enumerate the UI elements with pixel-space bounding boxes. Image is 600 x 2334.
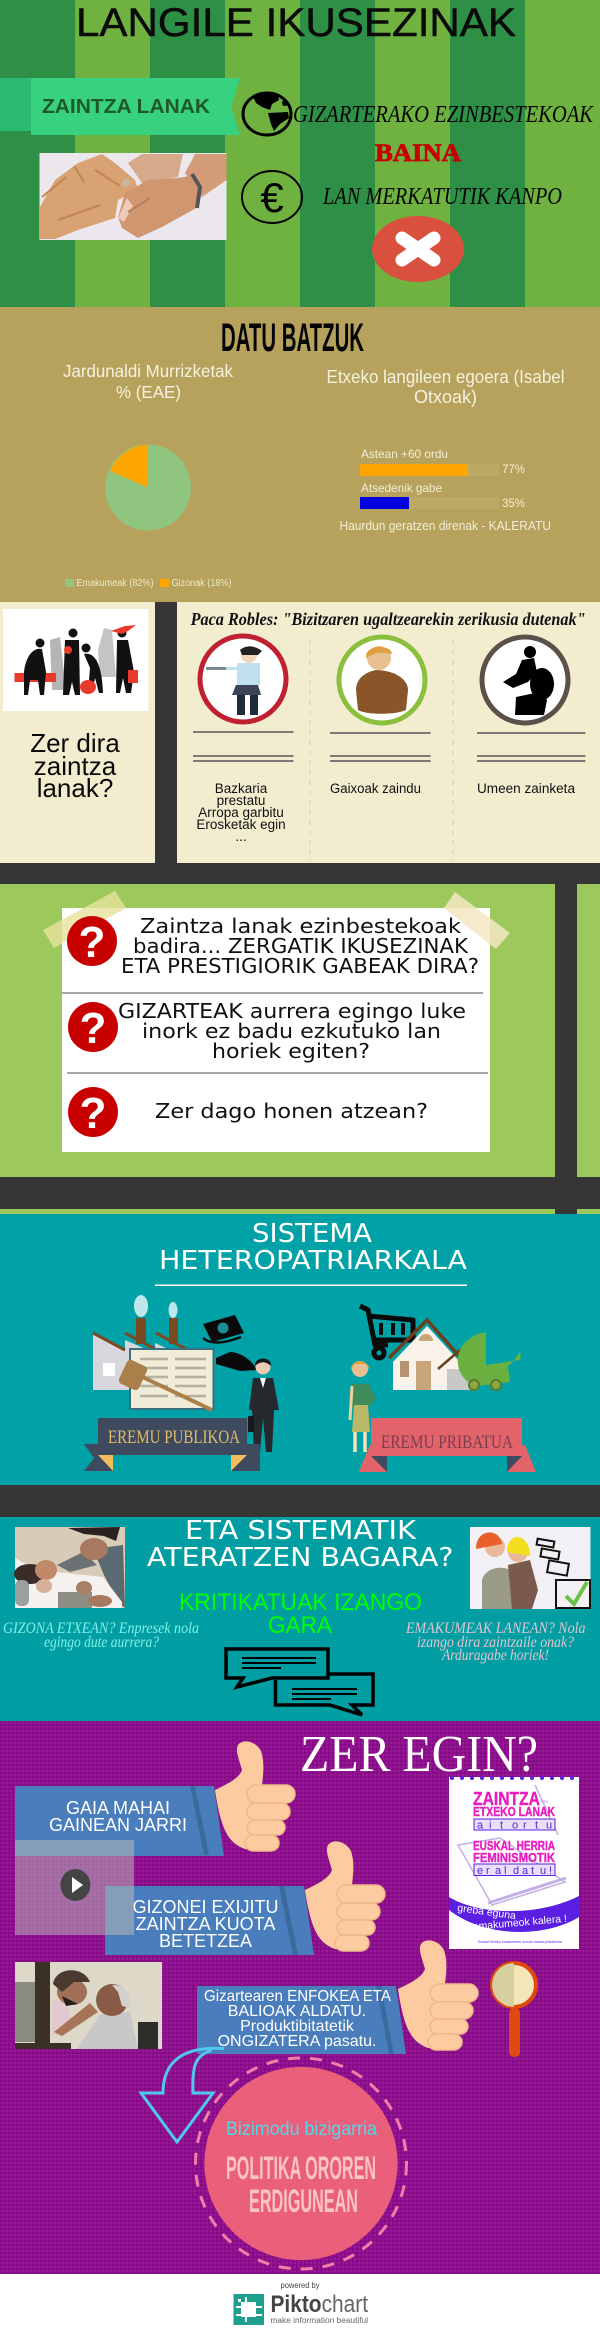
illustration: law book: [130, 1349, 214, 1409]
heading: SISTEMA: [252, 1219, 372, 1249]
ribbon: eremu publikoa: [84, 1418, 260, 1471]
column 3 text: umeen zainketa: Umeen zainketa: [477, 781, 575, 796]
column 2 text: gaixoak zaindu: [330, 733, 430, 796]
arm with thumb 2: GIZONEI EXIJITU: [132, 1897, 279, 1917]
arm with thumb 1: [15, 1741, 295, 1856]
icon: globe: [243, 93, 291, 135]
heading: ETA SISTEMATIK: [185, 1516, 417, 1546]
pie legend: Emakumeak (82%): [76, 578, 154, 589]
tape right: [444, 892, 510, 949]
pie legend: Gizonak (18%): [172, 578, 232, 589]
arrow: [141, 2048, 224, 2142]
circle: politika ororen erdigunean: ERDIGUNEAN: [249, 2183, 358, 2219]
bar chart: [340, 447, 551, 533]
icon: question 3: [68, 1087, 118, 1138]
text: lan merkatutik kanpo: LAN MERKATUTIK KANPO: [322, 184, 562, 210]
column 1 text: household chores: [193, 732, 294, 844]
photo: mother with helmet and checklist: [470, 1527, 590, 1609]
illustration: house: [389, 1320, 478, 1390]
panel: zer egin: [0, 1721, 600, 2274]
panel: sistema heteropatriarkala: [0, 1214, 600, 1485]
chart title: jardunaldi murrizketak: [63, 361, 233, 402]
illustration: pram: [458, 1332, 522, 1390]
illustration: shopping cart: [360, 1306, 413, 1358]
icon: euro: [242, 171, 302, 223]
illustration: businessman: [248, 1358, 279, 1452]
ribbon: eremu publikoa: EREMU PUBLIKOA: [108, 1427, 240, 1448]
column 1 text: household chores: Arropa garbitu: [198, 805, 284, 820]
card: [62, 908, 490, 1152]
heading: zer dira zaintza lanak: zaintza: [34, 751, 117, 781]
dark divider band: [0, 1485, 600, 1517]
column 1 text: household chores: ...: [235, 829, 247, 844]
text: gizona etxean: egingo dute aurrera?: [44, 1634, 159, 1651]
arm with thumb 3: Gizartearen ENFOKEA ETA: [204, 1988, 391, 2005]
photo: man caring for elderly person: [15, 1962, 162, 2049]
poster: Euskal Herriko emakumeen mundu martxa plataforma: [478, 1940, 562, 1944]
heading: [147, 1516, 454, 1573]
poster: emakumeok kalera !: [472, 1913, 567, 1933]
bar chart: Astean +60 ordu: [361, 447, 448, 461]
bar chart: 77%: [502, 462, 525, 476]
question 3 text: Zer dago honen atzean?: [155, 1099, 428, 1123]
ribbon: eremu pribatua: [359, 1418, 536, 1472]
column 1 text: household chores: prestatu: [217, 793, 265, 808]
subheading: kritikatuak izango gara: [179, 1589, 422, 1639]
icon: question 3: ?: [80, 1089, 106, 1138]
heading: ATERATZEN BAGARA?: [147, 1543, 454, 1573]
question 1 text: Zaintza lanak ezinbestekoak: [140, 914, 461, 938]
poster: eraldatu!: [477, 1865, 552, 1877]
icon: woman with tray: [200, 636, 286, 722]
ribbon: zaintza lanak: ZAINTZA LANAK: [42, 96, 211, 118]
image: women working silhouettes: [3, 609, 148, 711]
illustration: woman: [350, 1361, 376, 1452]
icon: chat bubbles: [226, 1649, 373, 1715]
poster: ZAINTZA: [473, 1789, 540, 1809]
panel: questions: [0, 884, 600, 1214]
question 1 text: ETA PRESTIGIORIK GABEAK DIRA?: [121, 954, 479, 978]
poster: greba eguna: [457, 1902, 517, 1922]
arm with thumb 2: ZAINTZA KUOTA: [136, 1914, 275, 1934]
ribbon: zaintza lanak: [0, 78, 240, 135]
chart title: etxeko langileen egoera: Otxoak): [414, 387, 477, 407]
chart title: etxeko langileen egoera: Etxeko langileen egoera (Isabel: [326, 367, 564, 387]
column 2 text: gaixoak zaindu: Gaixoak zaindu: [330, 781, 421, 796]
poster: ETXEKO LANAK: [473, 1804, 555, 1819]
arm with thumb 3: Produktibitatetik: [240, 2018, 355, 2035]
illustration: factory: [93, 1295, 188, 1390]
heading: ZER EGIN?: [300, 1726, 538, 1783]
text: emakumeak lanean: [405, 1620, 586, 1664]
heading: zer dira zaintza lanak: Zer dira: [30, 728, 120, 758]
poster: aitortu: [477, 1820, 552, 1832]
chart title: jardunaldi murrizketak: Jardunaldi Murrizketak: [63, 361, 233, 381]
footer: piktochart: powered by: [280, 2280, 320, 2290]
panel: intro striped header: [0, 0, 600, 307]
column 1 text: household chores: Erosketak egin: [196, 817, 286, 832]
heading: [159, 1219, 467, 1276]
question 2 text: inork ez badu ezkutuko lan: [142, 1019, 441, 1043]
photo: father with child: [14, 1527, 125, 1608]
bar chart: Haurdun geratzen direnak - KALERATU: [340, 519, 551, 533]
heading: zer dira zaintza lanak: lanak?: [37, 773, 113, 803]
text: gizona etxean: [3, 1620, 199, 1651]
illustration: money: [203, 1315, 244, 1343]
pie legend: [65, 578, 232, 589]
chart title: jardunaldi murrizketak: % (EAE): [116, 382, 181, 402]
video placeholder: [15, 1840, 134, 1935]
text: baina: BAINA: [375, 140, 461, 167]
heading: HETEROPATRIARKALA: [159, 1246, 467, 1276]
text: emakumeak lanean: Arduragabe horiek!: [441, 1647, 549, 1664]
arm with thumb 1: GAINEAN JARRI: [49, 1815, 187, 1835]
photo: holding hands: [40, 153, 226, 240]
panel: eta sistematik ateratzen bagara: [0, 1516, 600, 1721]
icon: parent lifting baby: [482, 637, 568, 723]
illustration: hand: [216, 1352, 257, 1371]
icon: question 2: ?: [80, 1004, 106, 1053]
icon: magnifying glass: [492, 1963, 536, 2057]
column 3 text: umeen zainketa: [477, 733, 586, 796]
wordmark: Piktochart: [270, 2291, 368, 2318]
question 2 text: [118, 999, 466, 1063]
text: emakumeak lanean: izango dira zaintzaile onak?: [417, 1634, 574, 1651]
title: LANGILE IKUSEZINAK: [76, 1, 516, 45]
icon: man in brown sweater: [339, 637, 425, 723]
circle: politika ororen erdigunean: [196, 2058, 406, 2269]
arm with thumb 3: BALIOAK ALDATU.: [228, 2003, 366, 2020]
icon: euro: €: [260, 174, 284, 221]
circle: politika ororen erdigunean: Bizimodu bizigarria: [226, 2119, 377, 2140]
bar chart: Atsedenik gabe: [361, 481, 442, 495]
panel: zer dira zaintza lanak: [0, 602, 600, 884]
bar chart: 35%: [502, 496, 525, 510]
arm with thumb 3: ONGIZATERA pasatu.: [218, 2033, 376, 2050]
arm with thumb 2: BETETZEA: [159, 1931, 252, 1951]
question 1 text: [121, 914, 479, 978]
ribbon: eremu pribatua: EREMU PRIBATUA: [381, 1432, 513, 1453]
footer: piktochart: [0, 2274, 600, 2334]
chart title: etxeko langileen egoera: [326, 367, 564, 407]
pie chart: [105, 444, 191, 530]
arm with thumb 1: GAIA MAHAI: [66, 1798, 170, 1818]
poster: [449, 1776, 579, 1949]
subheading: kritikatuak izango gara: GARA: [268, 1612, 332, 1639]
icon: question 1: [67, 916, 117, 967]
icon: question 2: [68, 1002, 118, 1053]
footer: piktochart: make information beautiful: [270, 2316, 368, 2325]
heading: DATU BATZUK: [221, 316, 364, 360]
question 2 text: GIZARTEAK aurrera egingo luke: [118, 999, 466, 1023]
tape left: [43, 891, 126, 948]
panel: datu batzuk: [0, 307, 600, 602]
question 1 text: badira... ZERGATIK IKUSEZINAK: [133, 934, 469, 958]
arm with thumb 3: [197, 1940, 478, 2054]
poster: eta: [541, 1799, 548, 1805]
arm with thumb 2: [105, 1841, 385, 1955]
column 1 text: household chores: Bazkaria: [215, 781, 268, 796]
icon: question 1: ?: [79, 918, 105, 967]
circle: politika ororen erdigunean: POLITIKA OROREN: [226, 2150, 376, 2186]
logo: [234, 2294, 264, 2325]
icon: red cross: [372, 216, 464, 282]
heading: zer dira zaintza lanak: [30, 728, 120, 803]
illustration: gavel: [118, 1359, 212, 1410]
subheading: kritikatuak izango gara: KRITIKATUAK IZANGO: [179, 1589, 422, 1616]
poster: EUSKAL HERRIA: [473, 1838, 555, 1853]
question 2 text: horiek egiten?: [212, 1039, 370, 1063]
poster: FEMINISMOTIK: [473, 1850, 556, 1865]
text: gizona etxean: GIZONA ETXEAN? Enpresek nola: [3, 1620, 199, 1637]
